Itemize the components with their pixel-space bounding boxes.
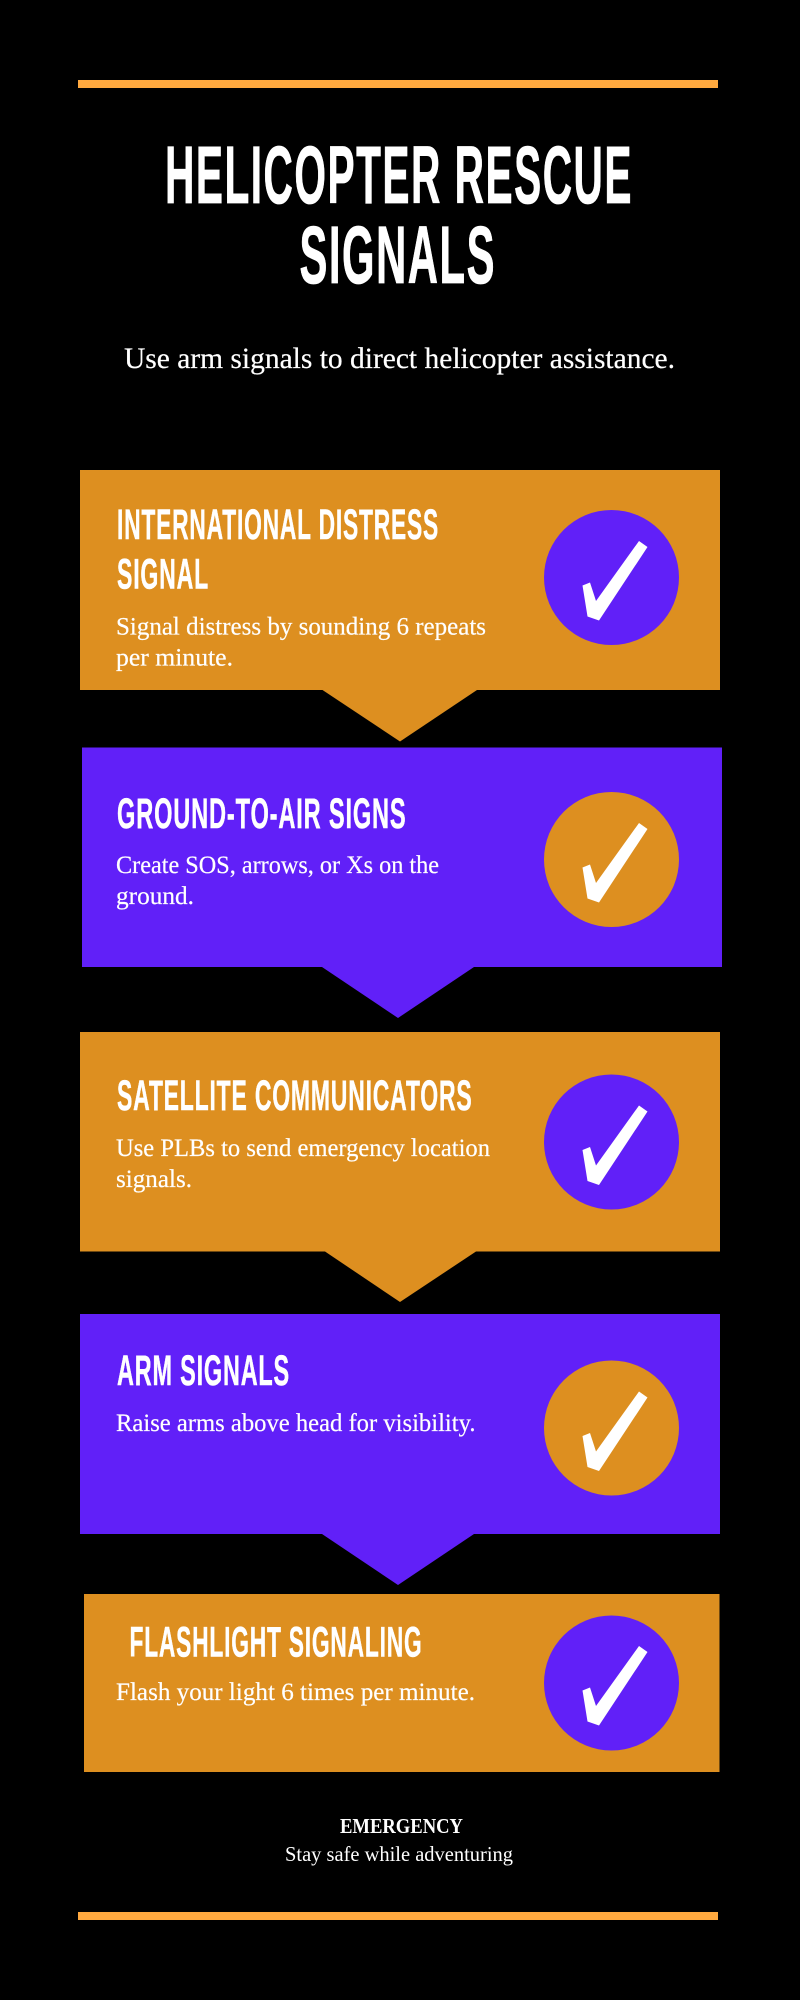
body text 2	[116, 852, 439, 910]
title	[165, 130, 633, 301]
body text 1: per minute.	[116, 644, 233, 672]
body text 2: Create SOS, arrows, or Xs on the	[116, 852, 439, 879]
panel 5 background	[84, 1594, 720, 1772]
body text 3: signals.	[116, 1166, 192, 1193]
title: SIGNALS	[300, 210, 496, 301]
panel 3 background	[80, 1032, 720, 1252]
icon: check badge 3	[544, 1074, 679, 1210]
heading 1: INTERNATIONAL DISTRESS	[117, 501, 439, 549]
body text 3	[116, 1135, 490, 1193]
heading 3: SATELLITE COMMUNICATORS	[117, 1072, 472, 1120]
body text 1: Signal distress by sounding 6 repeats	[116, 614, 486, 640]
arrow 4	[322, 1534, 474, 1585]
footer text: Stay safe while adventuring	[285, 1842, 513, 1866]
panel 4 background	[80, 1314, 720, 1534]
heading 4: ARM SIGNALS	[117, 1347, 290, 1395]
icon: check badge 4	[544, 1360, 679, 1496]
icon: check badge 1	[544, 510, 679, 645]
subtitle: Use arm signals to direct helicopter assistance.	[124, 343, 675, 375]
footer text	[285, 1814, 513, 1866]
body text 2: ground.	[116, 883, 194, 910]
icon: check badge 2	[544, 792, 679, 927]
footer text: EMERGENCY	[340, 1814, 463, 1838]
panel 1 background	[80, 470, 720, 690]
body text 5: Flash your light 6 times per minute.	[116, 1679, 475, 1706]
body text 1	[116, 614, 486, 672]
panel: international distress signal	[80, 470, 720, 742]
panel: satellite communicators	[80, 1032, 720, 1302]
heading 2: GROUND-TO-AIR SIGNS	[117, 790, 406, 838]
panel: flashlight signaling	[84, 1594, 720, 1772]
heading 5: FLASHLIGHT SIGNALING	[130, 1618, 422, 1666]
heading 1	[117, 501, 439, 598]
arrow 2	[322, 967, 474, 1018]
body text 3: Use PLBs to send emergency location	[116, 1135, 490, 1162]
panel: arm signals	[80, 1314, 720, 1585]
panel: ground-to-air signs	[82, 748, 722, 1018]
body text 4: Raise arms above head for visibility.	[116, 1410, 476, 1437]
panel 2 background	[82, 748, 722, 967]
heading 1: SIGNAL	[117, 550, 209, 598]
arrow 1	[322, 690, 477, 742]
icon: check badge 5	[544, 1616, 679, 1750]
arrow 3	[325, 1252, 476, 1302]
